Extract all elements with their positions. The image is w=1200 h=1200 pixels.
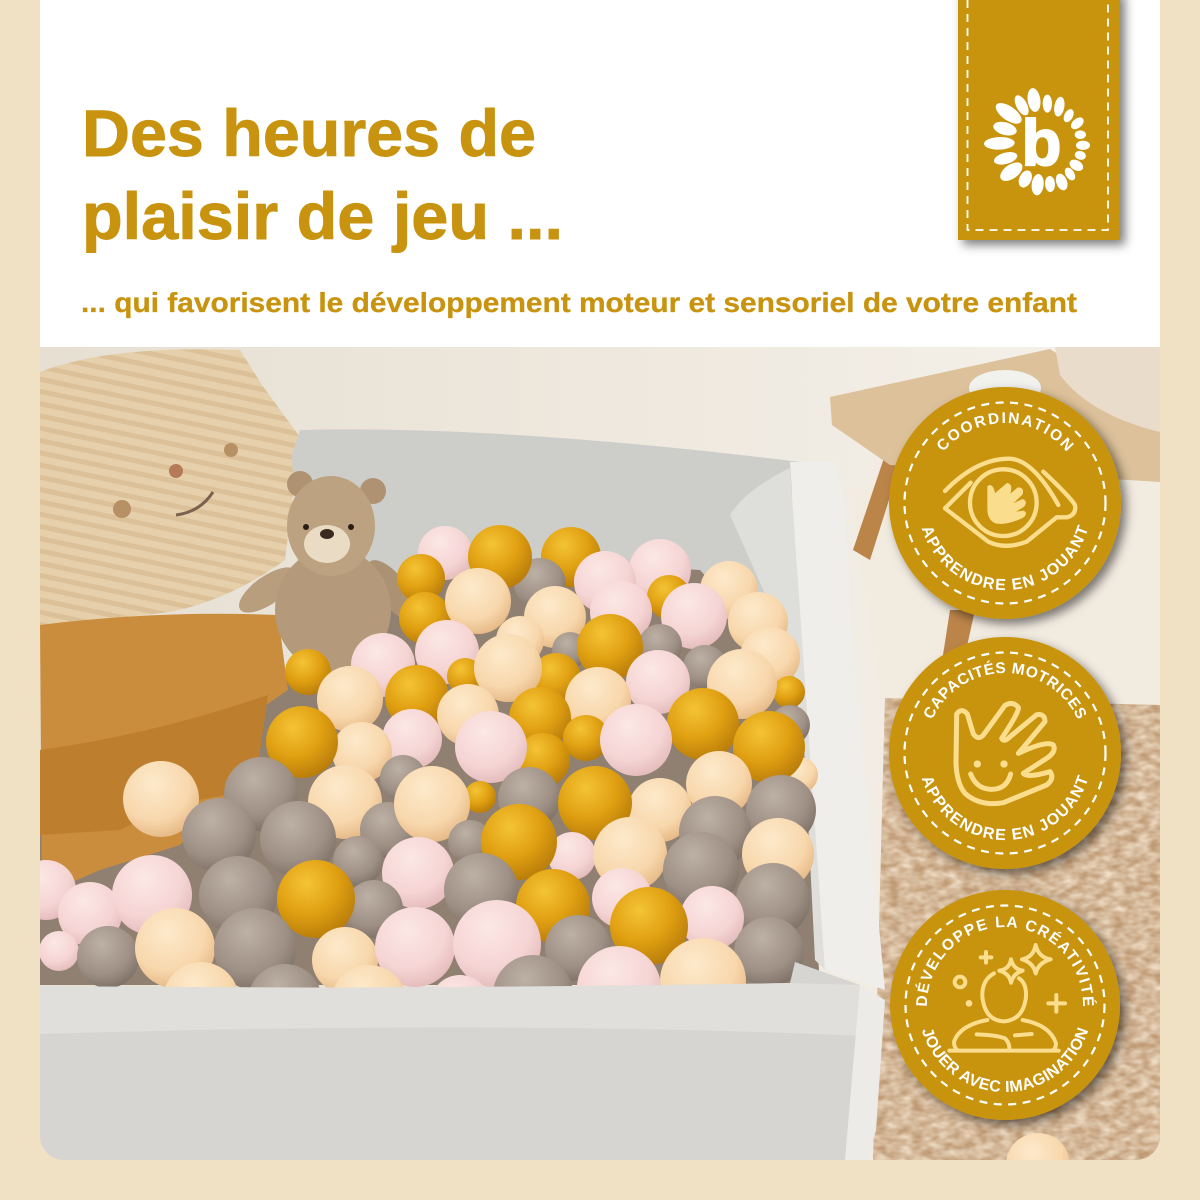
badge text: développe la créativité: DÉVELOPPE LA CRÉATIVITÉ xyxy=(915,916,1097,1006)
pool front wall xyxy=(40,962,885,1160)
badge text: coordination: COORDINATION xyxy=(938,412,1074,452)
photo: ball pit in a children's room xyxy=(16,347,1160,1197)
ball partly hidden at the bottom xyxy=(1006,1133,1070,1160)
pool inner back wall xyxy=(292,430,799,593)
blanket xyxy=(40,614,288,895)
icon: meditating person with sparkles xyxy=(949,945,1065,1051)
badge text: capacités motrices: CAPACITÉS MOTRICES xyxy=(924,660,1086,718)
icon: eye with hand xyxy=(945,459,1075,546)
icon: smiling hand xyxy=(956,703,1054,804)
badge text: jouer avec imagination: JOUER AVEC IMAGINATION xyxy=(922,1027,1088,1092)
badge text: apprendre en jouant: APPRENDRE EN JOUANT xyxy=(922,774,1088,840)
white header panel xyxy=(40,0,1160,347)
white floor rug xyxy=(1068,480,1160,705)
striped pillow xyxy=(40,349,302,628)
subtitle: ... qui favorisent le développement moteur et sensoriel de votre enfant xyxy=(81,287,1077,318)
balls xyxy=(40,525,818,988)
jute rug xyxy=(873,698,1160,1160)
title: Des heures de xyxy=(82,96,536,170)
brand tag with logo: b xyxy=(1022,106,1061,179)
brand tag with logo xyxy=(958,0,1120,240)
badge: coordination xyxy=(887,385,1133,631)
wall background xyxy=(40,347,1160,1160)
pool floor shade under balls xyxy=(40,560,820,985)
title xyxy=(82,96,563,253)
badge text: apprendre en jouant: APPRENDRE EN JOUANT xyxy=(922,524,1088,590)
badge: capacités motrices xyxy=(887,635,1133,881)
teddy bear xyxy=(239,471,408,672)
wooden stool xyxy=(830,347,1160,655)
title: plaisir de jeu ... xyxy=(82,179,563,253)
pool right wall xyxy=(730,462,885,990)
badge: créativité xyxy=(888,888,1132,1132)
